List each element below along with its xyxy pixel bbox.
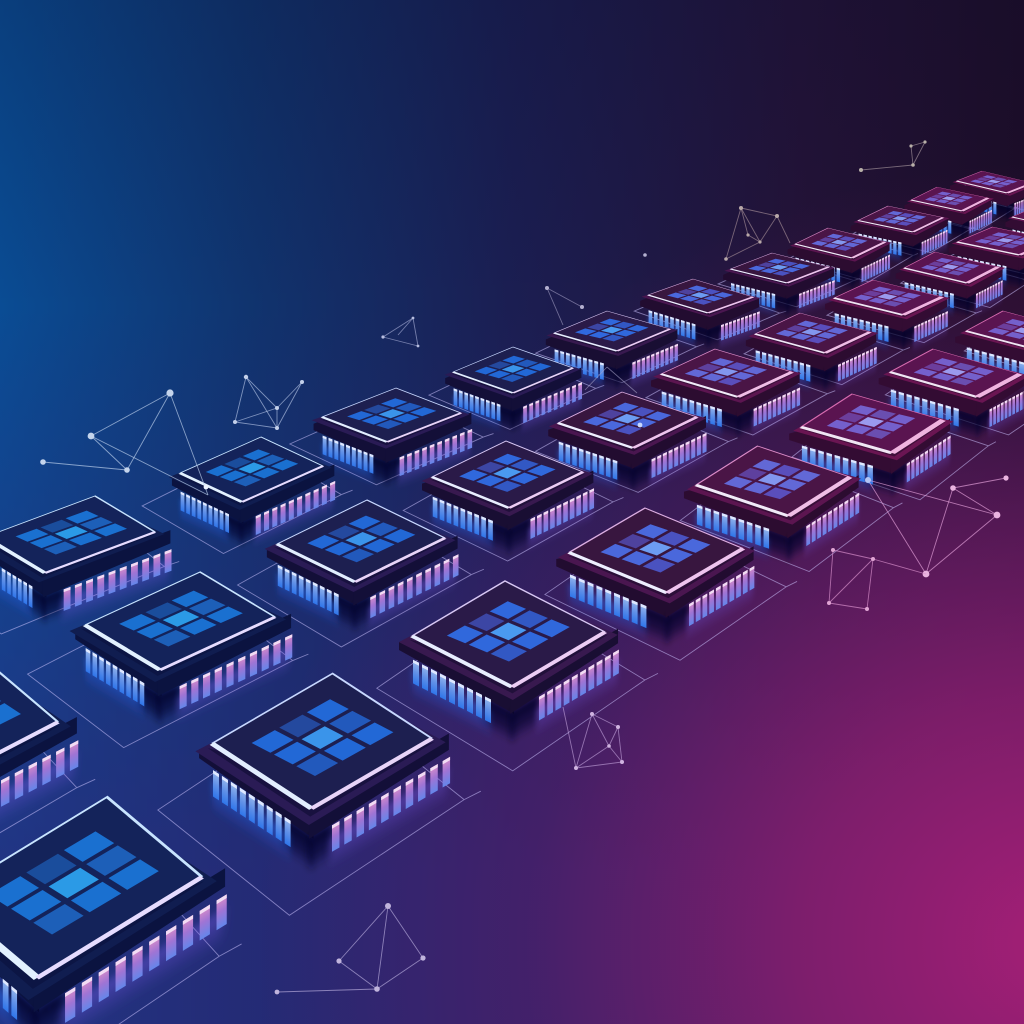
chip A5 — [670, 441, 879, 571]
network: right large — [865, 475, 1009, 577]
chip C10 — [893, 186, 1009, 246]
network: upper right — [724, 206, 790, 261]
chip B9 — [937, 226, 1024, 294]
chip B7 — [811, 279, 968, 357]
chip C11 — [939, 170, 1024, 226]
chip B6 — [734, 312, 893, 398]
chip A7 — [859, 348, 1024, 445]
network: left small — [233, 375, 304, 430]
network: top right — [859, 140, 927, 172]
network: left large — [40, 389, 208, 495]
chip C6 — [633, 278, 769, 355]
chip A6 — [771, 390, 977, 505]
chip B1 — [47, 567, 307, 734]
network: right small — [827, 548, 926, 611]
network: center top — [545, 253, 647, 427]
chip C4 — [445, 345, 582, 438]
chip C1 — [0, 493, 191, 632]
chip C5 — [541, 309, 684, 396]
chip B2 — [258, 497, 462, 640]
network: small triangle — [381, 317, 419, 347]
chip C9 — [840, 204, 964, 268]
chip B10 — [994, 206, 1024, 263]
chip C2 — [158, 433, 342, 554]
chip B8 — [881, 251, 1024, 322]
chip A1 — [0, 785, 254, 1024]
chip C3 — [307, 386, 475, 494]
network: center lower — [563, 707, 624, 770]
network: bottom — [275, 903, 426, 994]
chip A8 — [935, 310, 1024, 398]
chip B0 — [0, 649, 97, 865]
chip A3 — [395, 579, 622, 753]
chip B4 — [543, 389, 713, 500]
chip C7 — [716, 252, 844, 322]
chip A4 — [546, 506, 768, 654]
chip B3 — [420, 438, 595, 563]
chip B5 — [640, 348, 815, 446]
chip C8 — [777, 227, 906, 296]
chip A2 — [184, 671, 457, 882]
